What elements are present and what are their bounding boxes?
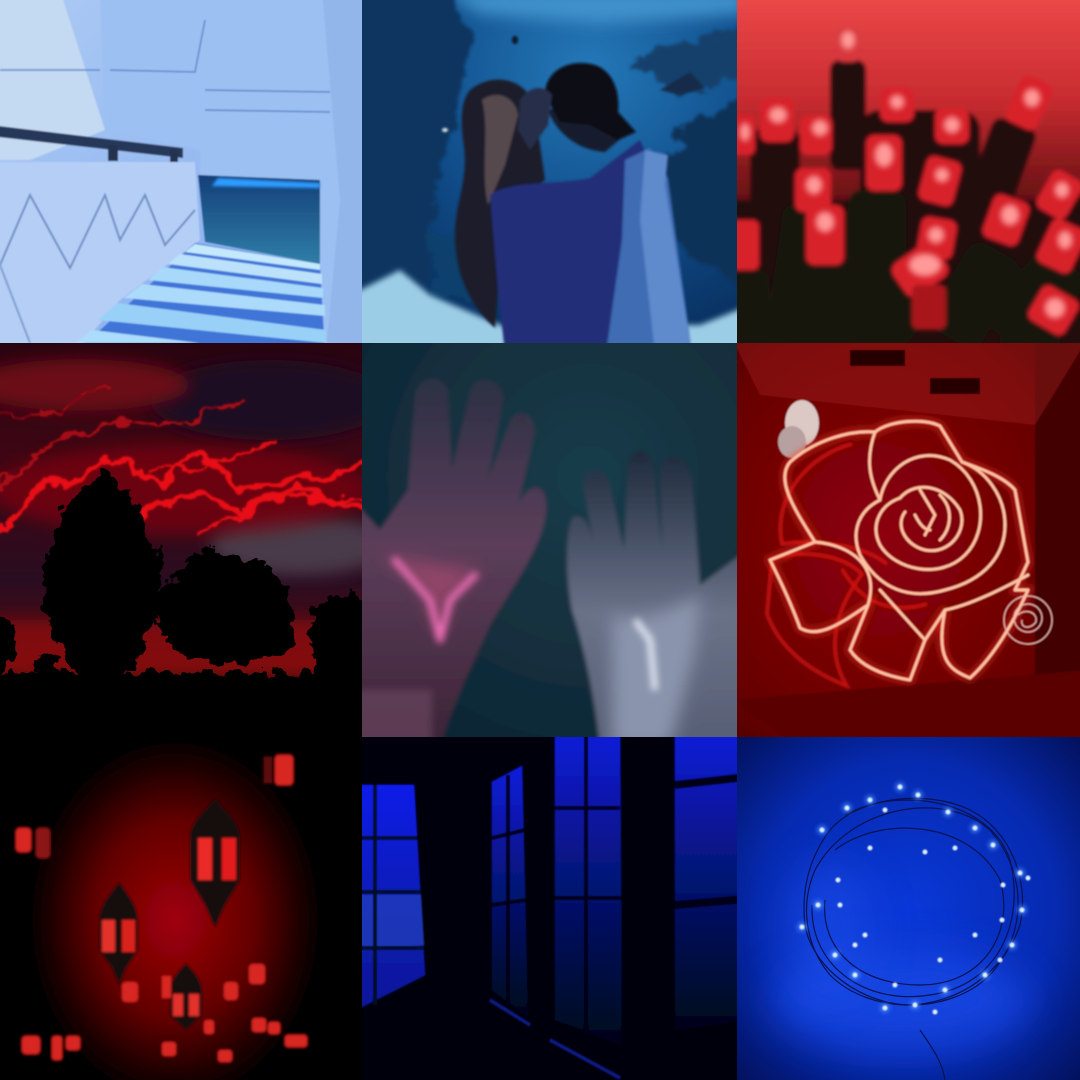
panel: red hanging lanterns	[13, 744, 318, 1080]
panel: red led string lights	[727, 0, 1080, 369]
panel: couple kissing in aquarium	[362, 0, 737, 343]
panel: two hands under teal light	[352, 333, 747, 747]
panel: illuminated blue staircase	[0, 0, 372, 353]
panel: red sunset with silhouetted trees	[0, 343, 362, 678]
panel: dark room with blue windows	[352, 727, 747, 1080]
trees: silhouettes	[0, 468, 362, 737]
panel: red neon rose sign	[727, 333, 1080, 747]
panel: blue fairy lights wreath	[737, 737, 1080, 1080]
